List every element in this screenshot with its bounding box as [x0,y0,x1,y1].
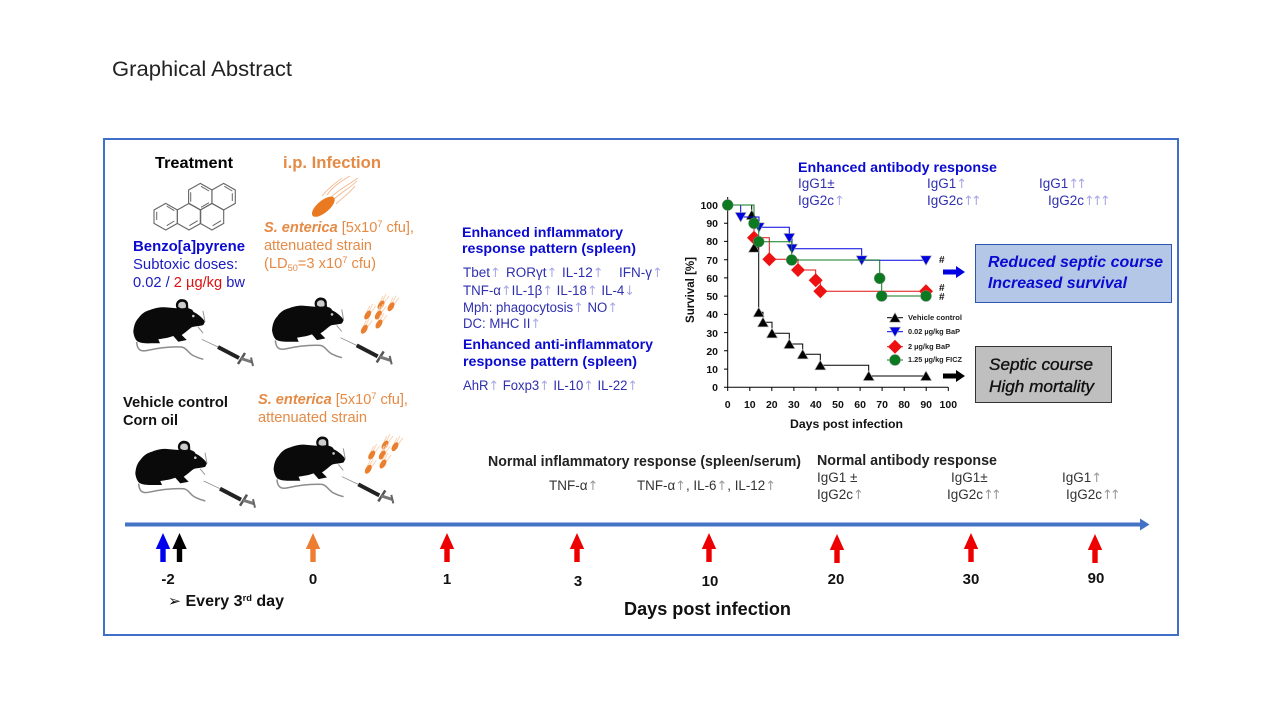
series: 0.02 µg/kg BaP [728,205,932,265]
text: enhanced antibody response: IgG1↑ [927,176,967,192]
text: benzo[a]pyrene dosing: Subtoxic doses: [133,257,238,273]
text: benzo[a]pyrene dosing [133,239,245,291]
axis label: days post infection: Days post infection [624,599,791,619]
text: vehicle control: Corn oil [123,413,178,429]
text: S. enterica infection dose: 7 [342,255,347,265]
text: S. enterica infection dose [264,219,414,273]
text: normal antibody response: Normal antibody response [817,453,997,469]
x-axis tick labels: 0 [725,399,731,411]
text: normal antibody response: IgG1↑ [1062,470,1102,486]
y-axis tick labels: 0 [712,382,718,394]
arrow: vehicle dose [172,533,187,562]
x-axis tick labels: 80 [898,399,910,411]
text: enhanced inflammatory response: Tbet↑ [463,265,501,281]
text: vehicle control [123,395,228,429]
text: enhanced anti-inflammatory response: Enhanced anti-inflammatory [463,337,653,353]
x-axis tick labels: 60 [854,399,866,411]
y-axis tick labels: 60 [706,273,718,285]
y-axis tick labels: 30 [706,328,718,340]
text: enhanced antibody response: Enhanced antibody response [798,160,997,176]
arrow: infection day [306,533,320,562]
chart legend: 2 µg/kg BaP [908,344,950,351]
survival chart [685,197,963,431]
series: 1.25 µg/kg FICZ [722,200,932,302]
significance markers [939,255,945,303]
icon: bacterium with flagella [309,176,358,220]
text: normal antibody response: IgG1 ± [817,470,857,485]
series: 2 µg/kg BaP [728,205,933,298]
text: dosing frequency: ➢ Every 3 [168,592,240,610]
text: S. enterica infection dose: attenuated strain [264,238,372,254]
day labels: 0 [309,571,317,588]
day labels: 10 [702,573,718,590]
text: normal antibody response: IgG2c↑↑ [1066,487,1119,503]
significance markers: # [939,255,945,266]
text: normal inflammatory response: TNF-α↑, IL-6↑, IL-12↑ [637,478,776,494]
x-axis tick labels: 50 [832,399,844,411]
text: enhanced anti-inflammatory response: response pattern (spleen) [463,354,637,370]
icon: treated mouse with syringe [133,299,253,366]
series: vehicle control [728,205,932,380]
title: Graphical Abstract [112,57,292,81]
text: normal antibody response [817,453,1119,503]
text: enhanced antibody response [798,160,1109,209]
day labels: 20 [828,571,844,588]
text: normal inflammatory response [488,454,801,494]
text: S. enterica control group: cfu], [376,392,408,408]
heading: treatment: Treatment [155,155,234,172]
text: benzo[a]pyrene dosing: Benzo[a]pyrene [133,239,245,255]
text: enhanced antibody response: IgG2c↑↑ [927,193,980,209]
significance markers: # [939,292,945,303]
text: enhanced inflammatory response: TNF-α↑IL-1β↑ IL-18↑ IL-4↓ [463,283,635,299]
chart legend: Vehicle control [908,315,962,322]
x-axis tick labels: 70 [876,399,888,411]
text: S. enterica control group: S. enterica [5x10 [258,392,371,408]
y-axis tick labels: 70 [706,255,718,267]
y-axis tick labels: 20 [706,346,718,358]
callout: reduced septic course: Increased survival [988,275,1128,292]
x-axis title: Days post infection [790,419,903,431]
significance markers: # [939,283,945,294]
text: enhanced inflammatory response: Mph: phagocytosis↑ NO↑ [463,300,618,316]
icon: infected mouse with syringe [272,297,392,364]
icon: benzo[a]pyrene molecule [154,183,235,230]
callout: septic course: Septic course [989,356,1093,374]
arrow: to reduced septic course [943,266,965,278]
day labels: 30 [963,571,979,588]
text: dosing frequency: rd [243,593,252,603]
text: enhanced antibody response: IgG1± [798,176,835,191]
text: enhanced inflammatory response: IL-12↑ [562,265,604,281]
text: S. enterica infection dose: =3 x10 [298,256,342,272]
y-axis tick labels: 40 [706,309,718,321]
callout: septic course: High mortality [989,378,1096,396]
icon: vehicle control mouse with syringe [135,441,255,508]
y-axis tick labels: 50 [706,291,718,303]
x-axis tick labels: 30 [788,399,800,411]
y-axis title: Survival [%] [685,257,697,323]
text: enhanced antibody response: IgG2c↑↑↑ [1048,193,1109,209]
chart axes [724,197,948,391]
text: enhanced inflammatory response: Enhanced inflammatory [462,225,623,241]
text: S. enterica control group: attenuated strain [258,410,367,426]
text: enhanced antibody response: IgG2c↑ [798,193,845,209]
heading: i.p. infection: i.p. Infection [283,153,381,172]
x-axis tick labels [725,399,957,411]
chart legend: 1.25 µg/kg FICZ [908,357,963,364]
y-axis tick labels: 90 [706,218,718,230]
chart legend: 0.02 µg/kg BaP [908,329,960,336]
x-axis tick labels: 40 [810,399,822,411]
text: enhanced anti-inflammatory response [463,337,653,394]
x-axis tick labels: 10 [744,399,756,411]
text: enhanced inflammatory response: response pattern (spleen) [462,241,636,257]
callout: reduced septic course [976,244,1172,302]
callout: reduced septic course: Reduced septic course [988,254,1163,271]
text: enhanced inflammatory response: DC: MHC II↑ [463,316,541,332]
x-axis tick labels: 20 [766,399,778,411]
text: normal antibody response: IgG2c↑ [817,487,864,503]
x-axis tick labels: 100 [940,399,957,411]
text: S. enterica control group [258,391,408,426]
day labels [161,570,1104,590]
icon: bacteria cluster control [363,434,403,475]
icon: bacteria cluster [359,294,399,335]
y-axis tick labels: 10 [706,364,718,376]
x-axis tick labels: 90 [920,399,932,411]
text: S. enterica control group: 7 [371,391,376,401]
text: S. enterica infection dose: 50 [288,263,298,273]
text: benzo[a]pyrene dosing: 0.02 / 2 µg/kg bw [133,275,245,291]
arrows: sampling days [440,533,1102,563]
callout: septic course [976,346,1112,402]
day labels: -2 [161,571,175,588]
text: normal inflammatory response: Normal inflammatory response (spleen/serum) [488,454,801,470]
text: vehicle control: Vehicle control [123,395,228,411]
text: S. enterica infection dose: cfu) [347,256,376,272]
text: enhanced inflammatory response: RORγt↑ [506,265,557,281]
text: normal antibody response: IgG2c↑↑ [947,487,1000,503]
text: normal antibody response: IgG1± [951,470,988,485]
text: dosing frequency: day [252,593,284,610]
arrow: to septic course [943,370,965,382]
text: enhanced inflammatory response [462,225,663,332]
day labels: 90 [1088,570,1104,587]
text: normal inflammatory response: TNF-α↑ [549,478,598,494]
text: S. enterica infection dose: cfu], [382,220,414,236]
timeline arrow [125,518,1150,530]
text: enhanced anti-inflammatory response: AhR↑ Foxp3↑ IL-10↑ IL-22↑ [463,378,638,394]
main panel frame [104,139,1178,635]
y-axis tick labels [700,200,718,394]
day labels: 1 [443,571,451,588]
text: S. enterica infection dose: (LD [264,256,287,272]
icon: infected control mouse with syringe [274,436,393,503]
text: enhanced inflammatory response: IFN-γ↑ [619,265,663,281]
text: S. enterica infection dose: 7 [377,219,382,229]
arrow: BaP dose [156,533,170,562]
day labels: 3 [574,573,582,590]
text: enhanced antibody response: IgG1↑↑ [1039,176,1085,192]
y-axis tick labels: 80 [706,236,718,248]
y-axis tick labels: 100 [700,200,718,212]
chart legend [887,313,963,366]
text: S. enterica infection dose: S. enterica [5x10 [264,220,377,236]
